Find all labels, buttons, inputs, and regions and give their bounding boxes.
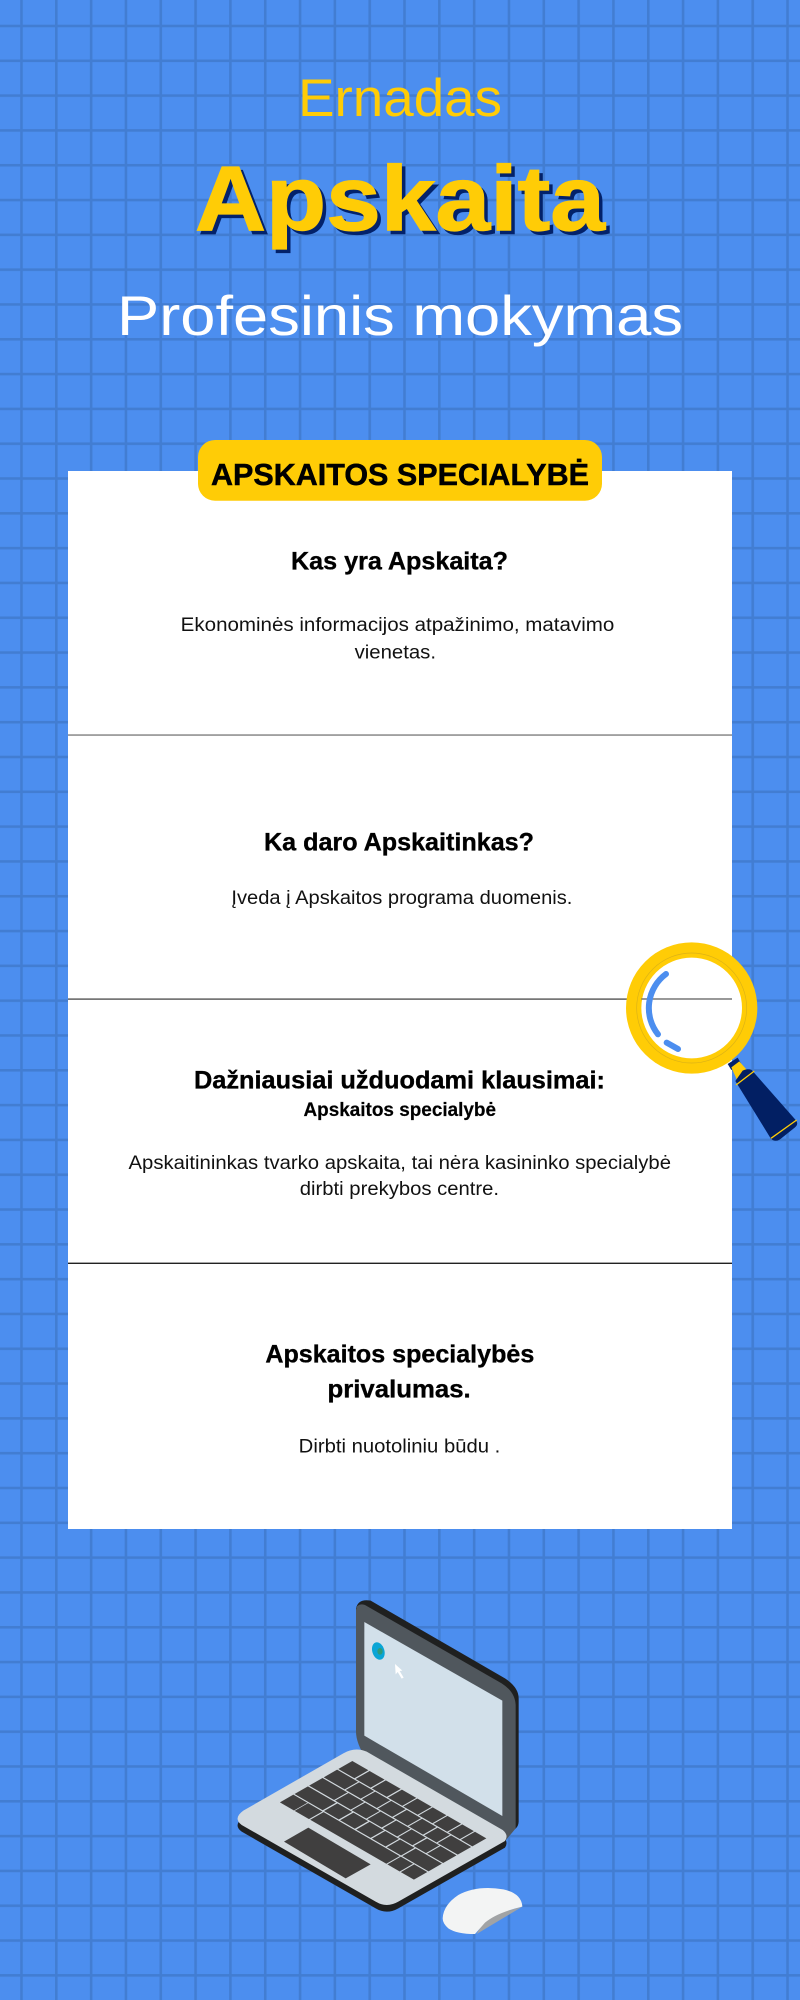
- globe icon on screen: [370, 1641, 387, 1661]
- title: Apskaita with navy shadow: Apskaita: [198, 152, 609, 254]
- section 3 body: Apskaitininkas tvarko apskaita, tai nėra kasininko specialybė: [128, 1153, 671, 1174]
- section 2 heading: Ka daro Apskaitinkas?: [264, 829, 534, 857]
- section 4 heading: Apskaitos specialybės: [265, 1341, 534, 1369]
- badge: Apskaitos specialybė: APSKAITOS SPECIALYBĖ: [211, 457, 589, 492]
- section 1 heading: Kas yra Apskaita?: [291, 547, 508, 575]
- title: Apskaita with navy shadow: Apskaita: [195, 148, 606, 250]
- section 3 body: [128, 1153, 671, 1200]
- section 4 body: Dirbti nuotoliniu būdu .: [299, 1436, 500, 1457]
- section 4 heading: [265, 1341, 534, 1404]
- cursor on screen: [395, 1664, 404, 1679]
- section 2 body: Įveda į Apskaitos programa duomenis.: [231, 888, 572, 909]
- mouse: [443, 1888, 522, 1934]
- section 3 heading: Dažniausiai užduodami klausimai:: [194, 1067, 605, 1095]
- section 4 heading: privalumas.: [328, 1376, 471, 1404]
- section 3 body: dirbti prekybos centre.: [300, 1179, 499, 1200]
- section 1 body: vienetas.: [355, 642, 436, 663]
- keyboard: [280, 1761, 486, 1880]
- panel: white information card: [68, 471, 732, 1529]
- subtitle: Profesinis mokymas: Profesinis mokymas: [117, 284, 683, 347]
- laptop lid: [356, 1600, 519, 1843]
- section 3 subheading: Apskaitos specialybė: [304, 1100, 496, 1121]
- laptop base: [238, 1750, 507, 1912]
- icon: magnifying glass: [626, 942, 797, 1141]
- icon: laptop and mouse: [238, 1600, 522, 1934]
- section 1 body: Ekonominės informacijos atpažinimo, matavimo: [181, 615, 614, 636]
- badge: Apskaitos specialybė: [198, 440, 602, 501]
- section 1 body: [181, 615, 614, 663]
- title: Ernadas: Ernadas: [298, 69, 502, 128]
- trackpad: [284, 1828, 371, 1878]
